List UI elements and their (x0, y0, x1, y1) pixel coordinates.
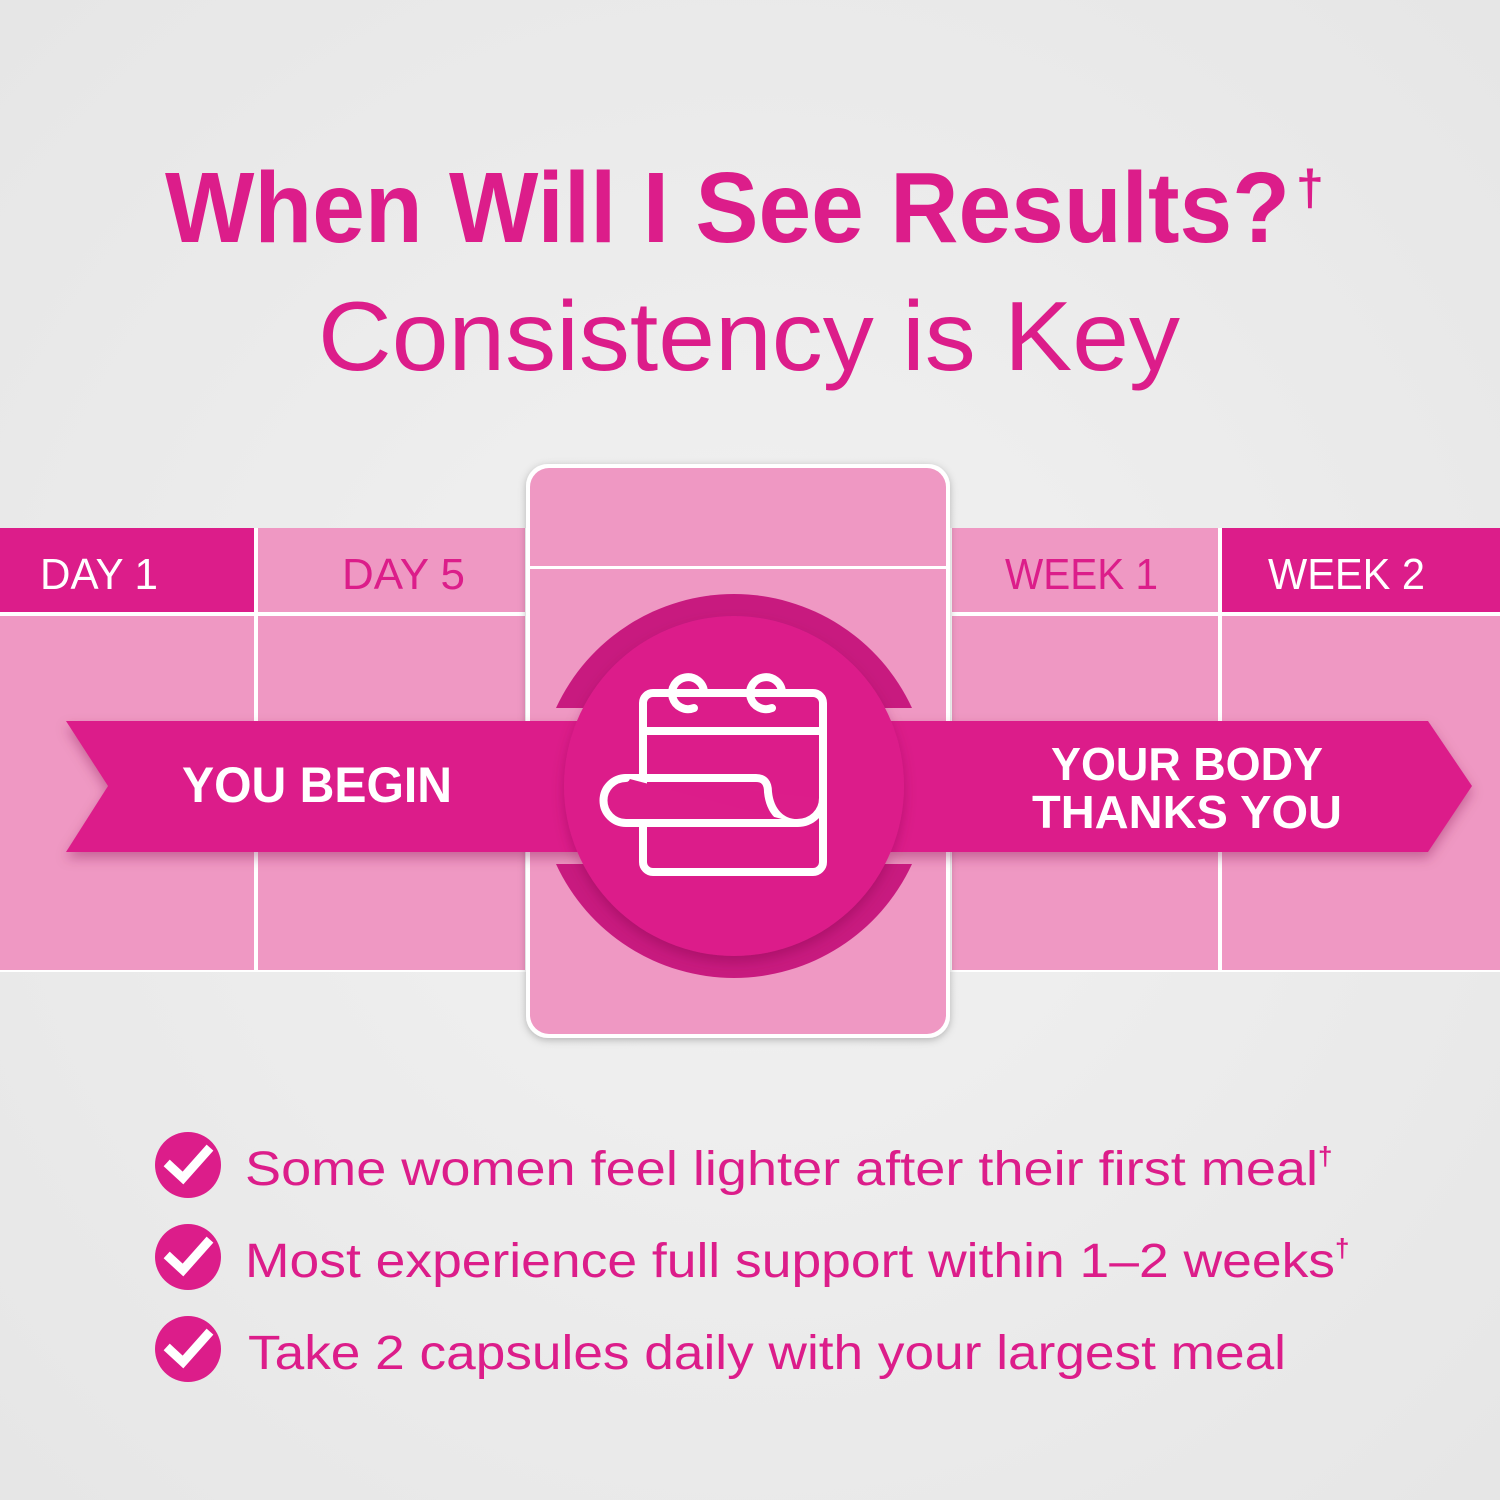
center card (526, 464, 950, 1038)
title: † (1296, 160, 1324, 216)
header: week 1: WEEK 1 (1005, 550, 1158, 599)
header: week 1 (952, 528, 1218, 612)
header: week 2 (1222, 528, 1500, 612)
header: day 5: DAY 5 (342, 550, 465, 599)
icon: calendar (604, 677, 823, 872)
ribbon: your body thanks you (890, 721, 1472, 852)
ribbon: your body thanks you: YOUR BODY (1051, 738, 1323, 790)
item 3: Take 2 capsules daily with your largest meal (248, 1327, 1286, 1380)
header: day 5 (258, 528, 525, 612)
timeline grid (0, 528, 1500, 972)
item 1: Some women feel lighter after their first meal (245, 1143, 1318, 1196)
header: day 1: DAY 1 (40, 550, 158, 599)
ribbon: you begin: YOU BEGIN (182, 757, 452, 813)
item 2 (155, 1224, 1349, 1290)
item 1: † (1318, 1141, 1332, 1171)
item 2: † (1335, 1233, 1349, 1263)
ribbon: your body thanks you: THANKS YOU (1032, 786, 1342, 838)
ribbon: you begin (66, 721, 580, 852)
item 3 (155, 1316, 1286, 1382)
subtitle: Consistency is Key (318, 281, 1180, 391)
center medallion (556, 594, 912, 978)
title: When Will I See Results? (165, 152, 1290, 264)
header: week 2: WEEK 2 (1268, 550, 1425, 599)
item 1 (155, 1132, 1332, 1198)
header: day 1 (0, 528, 254, 612)
checklist (155, 1132, 1349, 1382)
item 2: Most experience full support within 1–2 weeks (245, 1235, 1335, 1288)
